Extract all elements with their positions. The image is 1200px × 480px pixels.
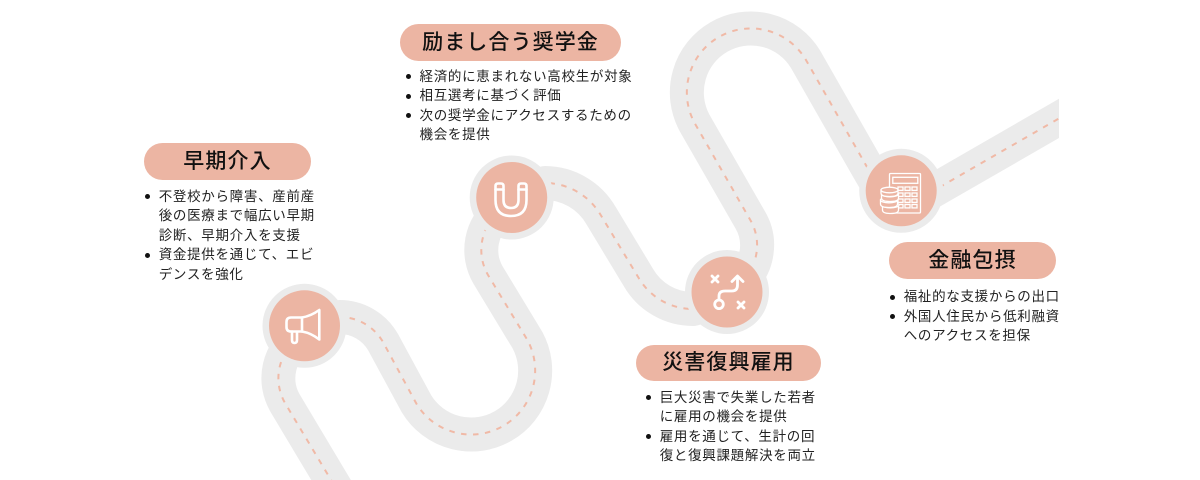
text block: employment bullets: 巨大災害で失業した若者 (660, 390, 816, 404)
text block: financial inclusion bullets: へのアクセスを担保 (904, 328, 1031, 343)
text block: early intervention bullets: 後の医療まで幅広い早期 (159, 208, 315, 223)
text block: scholarship bullets: 経済的に恵まれない高校生が対象 (420, 68, 632, 84)
heading: disaster recovery employment: 災害復興雇用 (662, 351, 795, 374)
icon: megaphone (262, 284, 346, 368)
heading: early intervention: 早期介入 (183, 150, 272, 173)
heading: disaster recovery employment (636, 345, 821, 381)
text block: early intervention bullets: 不登校から障害、産前産 (159, 188, 315, 204)
text block: financial inclusion bullets (890, 289, 1060, 343)
text block: employment bullets (646, 390, 816, 463)
winding road with dashed centre line and milestone icons (262, 12, 1059, 480)
panel: early intervention (144, 143, 315, 282)
text block: early intervention bullets: デンスを強化 (159, 266, 244, 282)
text block: scholarship bullets: 次の奨学金にアクセスするための (420, 108, 632, 122)
text block: scholarship bullets: 相互選考に基づく評価 (420, 88, 562, 103)
text block: employment bullets: 雇用を通じて、生計の回 (660, 428, 815, 444)
text block: early intervention bullets (145, 188, 315, 282)
heading: financial inclusion (889, 242, 1056, 279)
heading: early intervention (144, 143, 311, 180)
icon: route strategy (685, 250, 769, 334)
text block: employment bullets: 復と復興課題解決を両立 (660, 448, 816, 463)
road band (278, 28, 1075, 480)
text block: early intervention bullets: 資金提供を通じて、エビ (159, 247, 314, 262)
text block: employment bullets: に雇用の機会を提供 (660, 409, 788, 424)
panel: financial inclusion (889, 242, 1060, 343)
heading: mutual scholarship (400, 24, 621, 61)
text block: financial inclusion bullets: 外国人住民から低利融資 (904, 308, 1060, 324)
text block: early intervention bullets: 診断、早期介入を支援 (159, 228, 301, 242)
panel: disaster recovery employment (636, 345, 821, 463)
text block: financial inclusion bullets: 福祉的な支援からの出口 (904, 289, 1060, 304)
heading: mutual scholarship: 励まし合う奨学金 (422, 31, 599, 54)
icon: magnet (470, 156, 554, 240)
icon: calculator and coins (859, 149, 943, 233)
text block: scholarship bullets: 機会を提供 (420, 127, 490, 142)
dashed centre line (278, 28, 1075, 480)
text block: scholarship bullets (406, 68, 632, 142)
panel: mutual scholarship (400, 24, 632, 142)
heading: financial inclusion: 金融包摂 (928, 249, 1017, 272)
